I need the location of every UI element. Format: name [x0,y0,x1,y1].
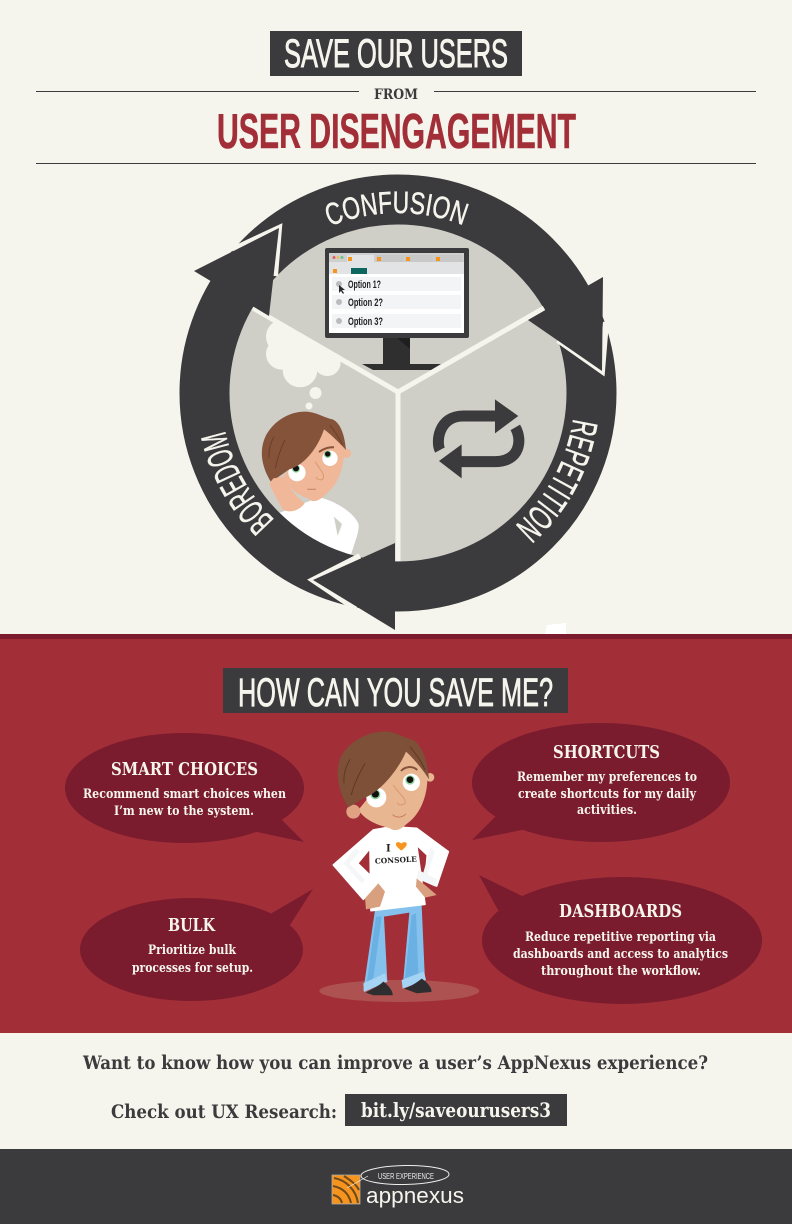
heading: HOW CAN YOU SAVE ME? [238,671,553,715]
bubble: shortcuts: create shortcuts for my daily [518,787,696,802]
bubble: smart choices [65,733,304,843]
cycle diagram [180,174,616,630]
logo: appnexus: USER EXPERIENCE [378,1172,434,1181]
title banner: save our users [270,31,522,76]
from divider: FROM [374,87,418,103]
icon: repeat arrows [438,399,519,478]
icon: monitor with options: Option 3? [348,316,383,328]
arrowhead: confusion [528,277,606,371]
heading [223,668,568,715]
bubble: bulk [80,889,313,1001]
title banner: save our users: SAVE OUR USERS [284,32,508,76]
bubble: shortcuts: SHORTCUTS [553,742,660,763]
panel: how can you save me [0,634,792,1033]
icon: monitor with options [325,248,469,370]
logo: appnexus [332,1165,464,1208]
dividers between sections [253,308,544,561]
bubble: shortcuts: Remember my preferences to [517,770,697,785]
ring band [204,200,592,586]
icon: monitor with options: Option 2? [348,297,383,309]
call to action: Check out UX Research: [111,1101,337,1123]
thought cloud [266,319,341,410]
call to action [82,1052,708,1126]
bubble: dashboards: DASHBOARDS [559,901,682,922]
bubble: dashboards [479,875,762,1004]
bubble: dashboards: dashboards and access to analytics [513,947,728,962]
bubble: smart choices: I’m new to the system. [114,804,254,819]
standing character [319,732,479,1002]
call to action: Want to know how you can improve a user’s AppNexus experience? [82,1052,708,1074]
arrowhead: repetition [313,543,395,630]
inner disc [226,221,570,565]
standing character: CONSOLE [375,855,417,866]
bubble: shortcuts [472,723,730,842]
bubble: smart choices: SMART CHOICES [111,759,258,780]
label: confusion: CONFUSION [326,191,469,225]
footer [0,1149,792,1224]
logo: appnexus: appnexus [366,1183,464,1208]
arrowhead: boredom [194,228,279,316]
bored character [262,412,359,557]
bubble: dashboards: throughout the workflow. [541,964,701,979]
icon: monitor with options: Option 1? [348,279,381,291]
bubble: bulk: BULK [168,915,216,936]
bubble: dashboards: Reduce repetitive reporting via [525,930,716,945]
bubble: shortcuts: activities. [577,803,637,818]
label: boredom: BOREDOM [201,432,274,536]
title: user disengagement: USER DISENGAGEMENT [217,105,576,159]
bubble: smart choices: Recommend smart choices when [83,787,286,802]
call to action: bit.ly/saveourusers3 [361,1098,551,1122]
bubble: bulk: Prioritize bulk [148,943,237,958]
bubble: bulk: processes for setup. [132,961,253,976]
standing character: I [386,843,391,854]
label: repetition: REPETITION [516,420,598,544]
